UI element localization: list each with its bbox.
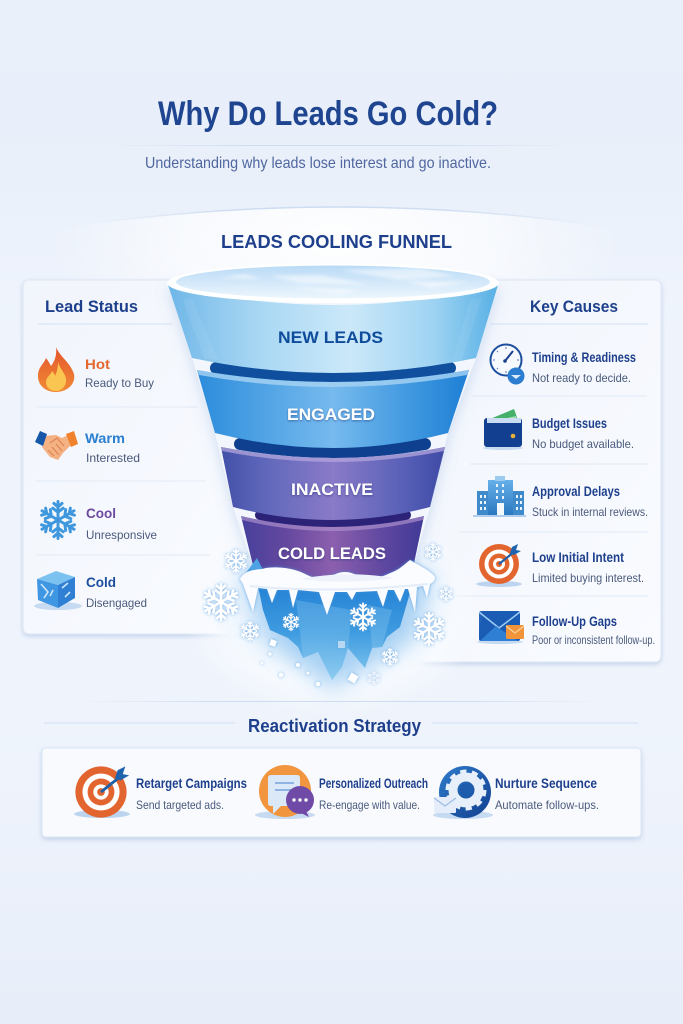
status: cool: Unresponsive	[86, 528, 157, 542]
icon: gear and envelope	[433, 766, 493, 819]
icon: ice cube	[34, 571, 82, 610]
status: hot: Ready to Buy	[85, 376, 154, 390]
status: cold: Disengaged	[86, 596, 147, 610]
icon: fire	[38, 347, 74, 392]
funnel heading: LEADS COOLING FUNNEL	[221, 232, 452, 252]
strategy: outreach: Personalized Outreach	[319, 776, 428, 791]
funnel	[167, 263, 499, 593]
ice base	[240, 558, 435, 680]
status: cool	[86, 505, 157, 542]
status: cool: Cool	[86, 505, 116, 521]
cause: budget: Budget Issues	[532, 416, 607, 431]
subtitle: Understanding why leads lose interest and go inactive.	[145, 155, 491, 172]
cause: timing	[532, 350, 636, 385]
icon: snowflake	[39, 502, 77, 538]
icon: handshake	[35, 431, 78, 460]
strategy: retarget	[136, 776, 247, 812]
snow cap	[240, 560, 435, 615]
status: cold	[86, 574, 147, 610]
cause: approval: Approval Delays	[532, 484, 620, 499]
cause: budget: No budget available.	[532, 437, 634, 451]
panel: key causes	[420, 280, 661, 662]
label: engaged: ENGAGED	[287, 405, 375, 424]
strategy: retarget: Retarget Campaigns	[136, 776, 247, 791]
cause: follow-up: Follow-Up Gaps	[532, 614, 617, 629]
heading: key causes: Key Causes	[530, 297, 618, 316]
funnel shadow	[168, 285, 498, 578]
heading: reactivation strategy: Reactivation Strategy	[248, 716, 421, 736]
label: cold leads: COLD LEADS	[278, 544, 386, 563]
funnel band: inactive	[221, 444, 445, 520]
cause: intent: Low Initial Intent	[532, 550, 624, 565]
label: inactive: INACTIVE	[291, 480, 373, 499]
icon: clock	[490, 344, 524, 384]
icon: chat bubbles	[255, 765, 315, 819]
icon: target	[476, 544, 522, 587]
snow glow	[183, 505, 483, 715]
status: warm	[85, 430, 140, 465]
strategy: retarget: Send targeted ads.	[136, 798, 224, 812]
strategy: nurture	[495, 776, 599, 812]
status: warm: Warm	[85, 430, 125, 446]
status: cold: Cold	[86, 574, 116, 590]
cause: timing: Timing & Readiness	[532, 350, 636, 365]
cause: intent: Limited buying interest.	[532, 571, 644, 585]
funnel top: water surface	[167, 263, 499, 303]
cause: approval	[532, 484, 648, 519]
status: hot: Hot	[85, 356, 110, 372]
strategy: outreach	[319, 776, 428, 812]
cause: timing: Not ready to decide.	[532, 371, 631, 385]
strategy: nurture: Nurture Sequence	[495, 776, 597, 791]
funnel band: new leads	[168, 285, 498, 373]
panel: reactivation strategy	[42, 748, 641, 837]
cause: follow-up	[532, 614, 655, 647]
icon: envelope	[477, 611, 524, 644]
icon: buildings	[473, 476, 526, 516]
panel: lead status	[23, 280, 248, 634]
icon: wallet	[483, 409, 523, 450]
heading: lead status: Lead Status	[45, 297, 138, 316]
cause: intent	[532, 550, 644, 585]
snowflakes	[203, 544, 453, 686]
icicles: blue ice	[258, 586, 412, 680]
title: Why Do Leads Go Cold?	[158, 95, 498, 133]
status: warm: Interested	[86, 451, 140, 465]
strategy: outreach: Re-engage with value.	[319, 798, 420, 812]
icon: target	[74, 766, 130, 818]
funnel band: engaged	[197, 368, 469, 448]
cause: approval: Stuck in internal reviews.	[532, 505, 648, 519]
cause: budget	[532, 416, 634, 451]
label: new leads: NEW LEADS	[278, 328, 383, 347]
funnel band: cold leads	[241, 515, 424, 593]
status: hot	[85, 356, 154, 390]
strategy: nurture: Automate follow-ups.	[495, 798, 599, 812]
